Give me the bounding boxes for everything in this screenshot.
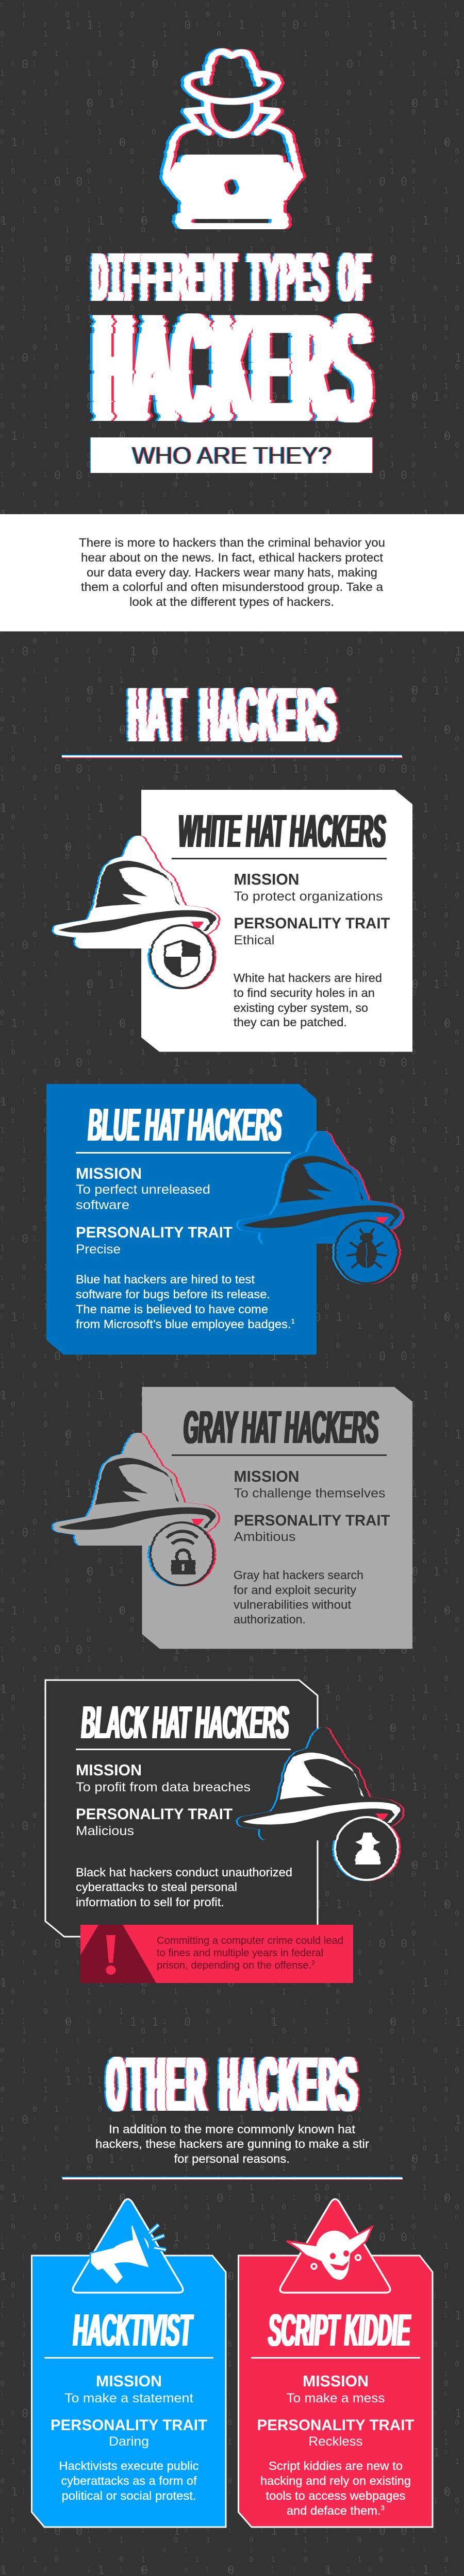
description: for and exploit security: [234, 1583, 357, 1597]
icon: gray hat with wifi lock: [53, 1433, 218, 1585]
description: hacking and rely on existing: [260, 2474, 411, 2487]
mission: MISSION: [234, 1467, 299, 1485]
intro text: for personal reasons.: [174, 2152, 290, 2165]
callout text: prison, depending on the offense.: [157, 1960, 310, 1971]
section heading: Hat Hackers: [61, 675, 403, 765]
description: vulnerabilities without: [234, 1598, 352, 1612]
mission: To challenge themselves: [234, 1486, 386, 1500]
mission: [76, 1761, 251, 1794]
personality trait: [234, 1512, 390, 1544]
personality trait: PERSONALITY TRAIT: [51, 2417, 207, 2434]
intro panel: [0, 514, 464, 632]
description: [234, 971, 382, 1029]
description: software for bugs before its release.: [76, 1287, 270, 1301]
panel: white hat hackers: [53, 790, 412, 1052]
icon: blue hat with bug: [238, 1131, 403, 1283]
description: political or social protest.: [62, 2489, 196, 2502]
icon: white hat with shield: [53, 836, 218, 988]
description: and deface them.: [287, 2504, 378, 2517]
panel: gray hat hackers: [53, 1387, 412, 1649]
description: cyberattacks to steal personal: [76, 1880, 237, 1894]
personality trait: Reckless: [308, 2434, 363, 2449]
triangle emblem: [73, 2199, 183, 2293]
icon: black hat with hacker: [238, 1727, 403, 1880]
mission: To perfect unreleased: [76, 1182, 210, 1197]
description: [76, 1273, 295, 1331]
mission: [287, 2372, 385, 2405]
description: to find security holes in an: [234, 986, 375, 999]
description: 1: [291, 1317, 295, 1325]
hero illustration: hacker at laptop: [165, 52, 299, 229]
panel: script kiddie: [238, 2199, 433, 2527]
mission: [64, 2372, 193, 2405]
mission: software: [76, 1198, 129, 1212]
intro text: our data every day. Hackers wear many hats, making: [87, 566, 377, 579]
personality trait: [76, 1806, 233, 1838]
icon: warning triangle: [80, 1925, 156, 1983]
panel: hacktivist: [32, 2199, 226, 2527]
personality trait: [257, 2417, 415, 2449]
main title: [92, 242, 372, 469]
mission: MISSION: [234, 870, 299, 888]
panel: blue hat hackers: [46, 1084, 403, 1354]
description: they can be patched.: [234, 1015, 347, 1029]
section heading: Other Hackers: [61, 2045, 403, 2180]
mission: MISSION: [96, 2372, 162, 2390]
mission: [234, 1467, 386, 1500]
description: tools to access webpages: [266, 2489, 405, 2502]
mission: To profit from data breaches: [76, 1780, 251, 1794]
personality trait: [234, 915, 390, 947]
description: information to sell for profit.: [76, 1895, 224, 1909]
description: Gray hat hackers search: [234, 1568, 363, 1582]
description: [59, 2459, 199, 2502]
triangle emblem: [280, 2199, 390, 2293]
icon: goblin: [287, 2227, 372, 2281]
callout: legal warning: [80, 1925, 353, 1983]
mission: To protect organizations: [234, 889, 383, 904]
personality trait: PERSONALITY TRAIT: [76, 1806, 233, 1823]
description: existing cyber system, so: [234, 1001, 368, 1014]
description: 3: [381, 2504, 385, 2512]
mission: To make a statement: [64, 2391, 193, 2405]
panel: hacktivist: HACKTIVIST: [73, 2304, 193, 2355]
personality trait: [76, 1224, 233, 1257]
personality trait: PERSONALITY TRAIT: [76, 1224, 233, 1241]
description: Script kiddies are new to: [269, 2459, 403, 2472]
personality trait: [51, 2417, 207, 2449]
description: The name is believed to have come: [76, 1302, 268, 1316]
personality trait: Precise: [76, 1242, 121, 1257]
intro text: In addition to the more commonly known hat: [109, 2123, 356, 2136]
description: from Microsoft’s blue employee badges.: [76, 1317, 285, 1331]
intro text: hear about on the news. In fact, ethical hackers protect: [81, 551, 384, 564]
intro text: [95, 2123, 369, 2165]
personality trait: PERSONALITY TRAIT: [234, 915, 390, 932]
intro text: hackers, these hackers are gunning to make a stir: [95, 2137, 369, 2150]
description: [260, 2459, 411, 2517]
personality trait: Malicious: [76, 1824, 134, 1838]
description: White hat hackers are hired: [234, 971, 382, 985]
icon: megaphone: [90, 2223, 166, 2285]
description: [234, 1568, 363, 1626]
mission: To make a mess: [287, 2391, 385, 2405]
callout text: Committing a computer crime could lead: [157, 1935, 343, 1946]
mission: [76, 1164, 210, 1212]
description: cyberattacks as a form of: [61, 2474, 197, 2487]
description: Black hat hackers conduct unauthorized: [76, 1866, 292, 1879]
description: Hacktivists execute public: [59, 2459, 199, 2472]
callout text: 2: [311, 1959, 315, 1967]
subtitle: Who Are They: WHO ARE THEY?: [132, 442, 332, 469]
description: [76, 1866, 292, 1909]
personality trait: PERSONALITY TRAIT: [257, 2417, 415, 2434]
intro text: them a colorful and often misunderstood group. Take a: [81, 580, 383, 594]
personality trait: Ethical: [234, 933, 274, 947]
mission: MISSION: [76, 1164, 142, 1182]
description: Blue hat hackers are hired to test: [76, 1273, 255, 1286]
intro text: [79, 536, 385, 608]
callout text: [157, 1935, 343, 1971]
mission: MISSION: [76, 1761, 142, 1779]
subtitle bar: [91, 437, 372, 473]
personality trait: Ambitious: [234, 1530, 296, 1544]
mission: [234, 870, 383, 904]
intro text: There is more to hackers than the criminal behavior you: [79, 536, 385, 549]
callout text: to fines and multiple years in federal: [157, 1947, 323, 1959]
description: authorization.: [234, 1613, 306, 1626]
intro text: look at the different types of hackers.: [129, 595, 334, 608]
mission: MISSION: [303, 2372, 369, 2390]
personality trait: PERSONALITY TRAIT: [234, 1512, 390, 1529]
panel: black hat hackers: [45, 1680, 403, 1937]
personality trait: Daring: [109, 2434, 149, 2449]
